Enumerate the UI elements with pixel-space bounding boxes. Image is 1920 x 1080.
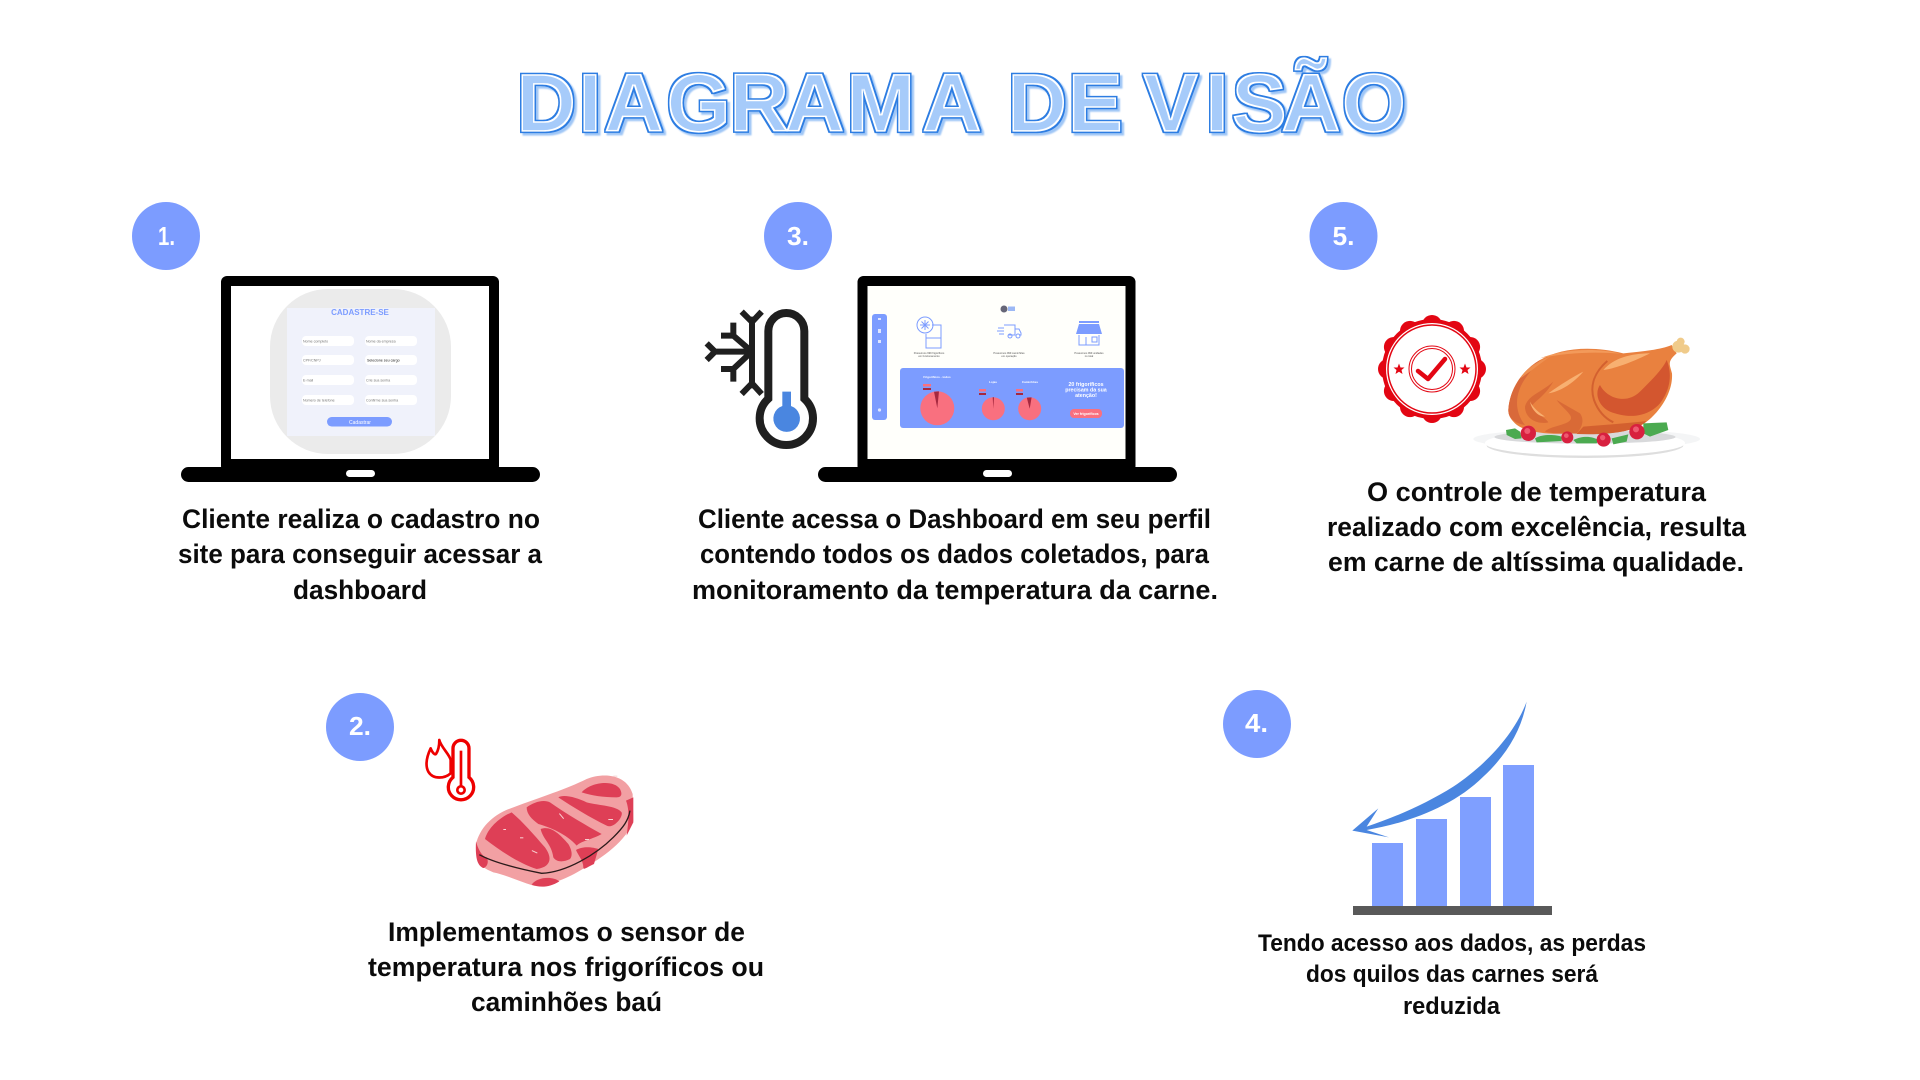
panel: step 3	[692, 202, 1218, 605]
step badge 2	[326, 693, 394, 761]
text block 3	[692, 504, 1218, 605]
icon: laptop with sign-up form: CPF/CNPJ	[303, 358, 321, 362]
dashboard stat captions: em funcionamento	[918, 354, 940, 358]
dashboard stat captions: Possuímos 999 unidades	[1074, 351, 1104, 355]
dashboard stat captions: em operação	[1001, 354, 1017, 358]
text block 3: contendo todos os dados coletados, para	[700, 539, 1210, 569]
text block 1	[178, 504, 543, 605]
icon: laptop with sign-up form: Crie sua senha	[366, 378, 390, 382]
icon: laptop with sign-up form	[181, 276, 540, 482]
step badge 1	[132, 202, 200, 270]
dashboard chart panel	[900, 368, 1124, 428]
icon: roast turkey on plate	[1473, 338, 1700, 458]
text block 2: caminhões baú	[471, 987, 662, 1017]
icon: store	[1076, 321, 1102, 345]
dashboard chart panel: Caminhões	[1022, 380, 1038, 384]
dashboard chart panel: 20 frigoríficos	[1068, 382, 1104, 388]
text block 1: Cliente realiza o cadastro no	[182, 504, 540, 534]
text block 4: reduzida	[1403, 993, 1501, 1020]
text block 3: Cliente acessa o Dashboard em seu perfil	[698, 504, 1211, 534]
step badge 2: 2.	[349, 711, 371, 741]
arrow	[1352, 702, 1527, 837]
dashboard stat captions	[914, 351, 1104, 358]
text block 5: em carne de altíssima qualidade.	[1328, 547, 1744, 577]
text block 5	[1327, 477, 1747, 577]
icon: quality seal	[1378, 315, 1486, 423]
text block 4: dos quilos das carnes será	[1306, 961, 1599, 988]
icon: laptop with sign-up form: Cadastrar	[349, 420, 371, 426]
icon: laptop with sign-up form: E-mail	[303, 378, 313, 382]
title: DIAGRAMA DE VISÃO	[517, 58, 1406, 149]
step badge 4: 4.	[1245, 708, 1268, 738]
text block 1: site para conseguir acessar a	[178, 539, 543, 569]
dashboard stat captions: no total	[1085, 354, 1094, 358]
text block 5: O controle de temperatura	[1367, 477, 1707, 507]
icon: meat steak	[476, 775, 633, 887]
icon: truck	[997, 325, 1021, 338]
step badge 5: 5.	[1332, 221, 1354, 251]
icon: laptop with sign-up form: Número de telefone	[303, 398, 335, 402]
text block 4	[1258, 930, 1646, 1020]
dashboard chart panel: Lojas	[989, 380, 997, 384]
step badge 3: 3.	[787, 221, 809, 251]
dashboard chart panel: atenção!	[1075, 393, 1097, 399]
dashboard sidebar	[872, 314, 887, 420]
icon: hot thermometer with flame	[426, 740, 474, 800]
dashboard stat captions: Possuímos 999 caminhões	[993, 351, 1025, 355]
panel: step 2	[326, 693, 764, 1017]
panel: step 1	[132, 202, 543, 605]
icon: laptop with sign-up form: Nome da empresa	[366, 340, 396, 344]
text block 3: monitoramento da temperatura da carne.	[692, 575, 1218, 605]
bar chart	[1353, 765, 1552, 915]
text block 2: Implementamos o sensor de	[388, 917, 745, 947]
text block 5: realizado com excelência, resulta	[1327, 512, 1747, 542]
step badge 4	[1223, 690, 1291, 758]
panel: step 5	[1310, 202, 1747, 577]
dashboard chart panel: Ver frigoríficos	[1073, 412, 1099, 416]
dashboard chart panel: Frigoríficos - todos	[923, 375, 951, 379]
icon: laptop with dashboard	[818, 276, 1177, 482]
panel: step 4	[1223, 690, 1646, 1020]
icon: fridge	[917, 317, 941, 348]
icon: laptop with sign-up form: Confirme sua senha	[366, 398, 398, 402]
icon: cold thermometer	[707, 312, 813, 445]
text block 1: dashboard	[293, 575, 427, 605]
icon: laptop with sign-up form: CADASTRE-SE	[331, 308, 390, 317]
step badge 3	[764, 202, 832, 270]
dashboard chart panel: precisam da sua	[1065, 388, 1107, 394]
step badge 5	[1310, 202, 1378, 270]
step badge 1: 1.	[158, 221, 175, 251]
dashboard stat captions: Possuímos 999 frigoríficos	[914, 351, 945, 355]
text block 2	[368, 917, 764, 1017]
dashboard logo	[1000, 306, 1015, 312]
icon: laptop with sign-up form: Nome completo	[303, 340, 328, 344]
text block 4: Tendo acesso aos dados, as perdas	[1258, 930, 1646, 957]
icon: laptop with sign-up form: Selecione seu cargo	[367, 358, 400, 362]
text block 2: temperatura nos frigoríficos ou	[368, 952, 764, 982]
